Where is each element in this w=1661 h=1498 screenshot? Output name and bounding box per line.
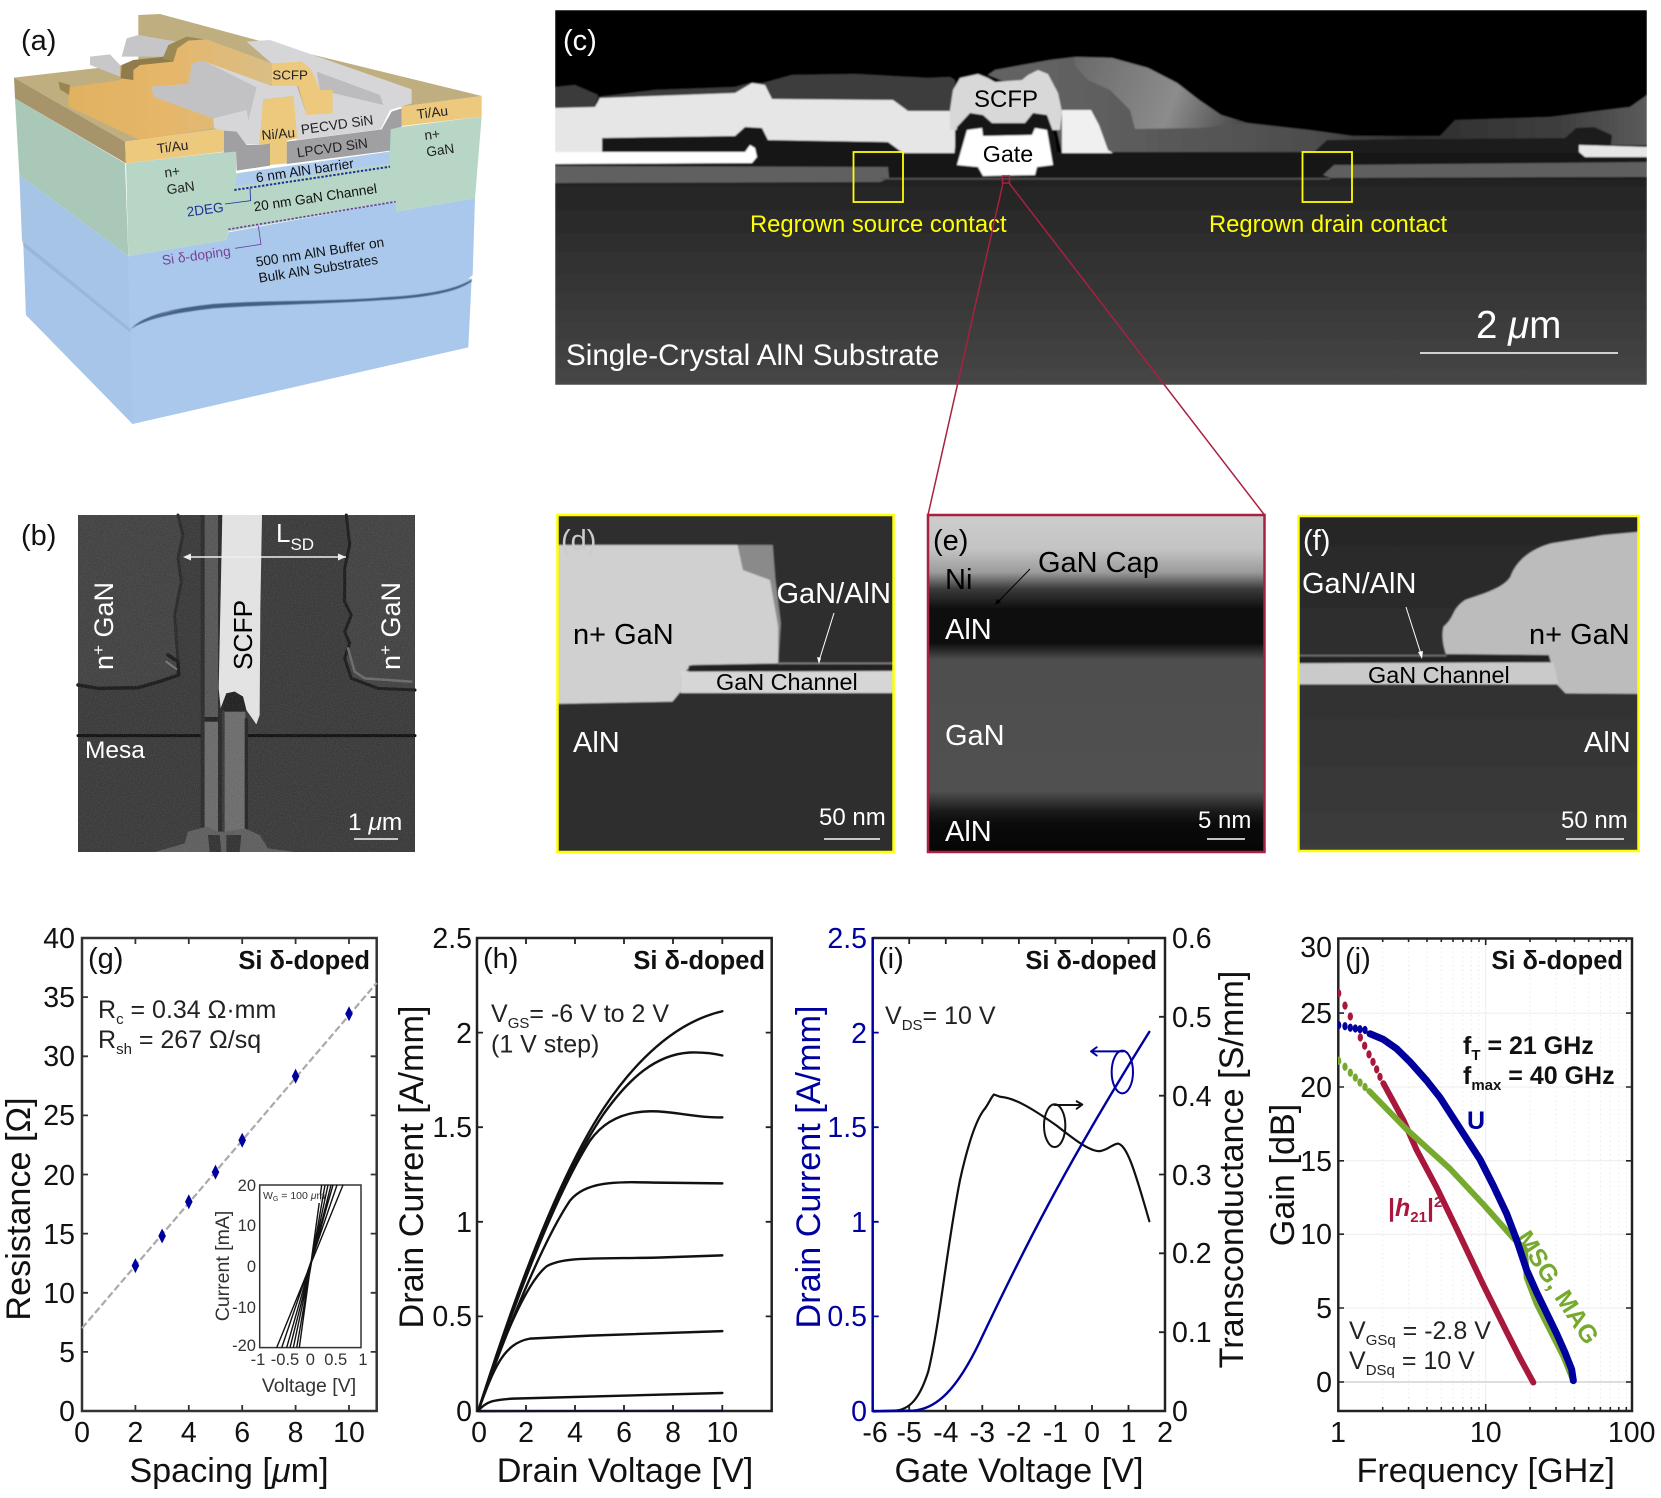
- AlN barrier label: AlN: [945, 614, 992, 646]
- x tick labels: [74, 1417, 365, 1449]
- x tick labels: 6: [616, 1417, 632, 1449]
- right y axis title: Transconductance [S/mm]: [1213, 971, 1251, 1368]
- sheet resistance text: R: [98, 1026, 116, 1054]
- AlN label: AlN: [573, 727, 620, 759]
- y tick labels: 25: [43, 1100, 75, 1132]
- y axis title: Resistance [Ω]: [0, 1097, 38, 1321]
- x tick labels: [862, 1417, 1173, 1449]
- Gate label: Gate: [983, 141, 1033, 167]
- L_SD dimension: [183, 518, 346, 560]
- right y tick labels: 0.4: [1172, 1081, 1212, 1113]
- U label: U: [1467, 1107, 1485, 1135]
- GaN/AlN label: GaN/AlN: [776, 578, 891, 610]
- x tick labels: 8: [288, 1417, 304, 1449]
- source contact box: [854, 152, 903, 202]
- fmax text: = 40 GHz: [1501, 1062, 1615, 1090]
- gain traces: [1336, 989, 1573, 1382]
- scale bar 1 um: 1 μm: [348, 809, 402, 836]
- x tick labels: -3: [970, 1417, 995, 1449]
- inset I-V chart: 0: [247, 1258, 256, 1276]
- y tick labels: 20: [43, 1160, 75, 1192]
- 2DEG dotted line: [234, 167, 390, 190]
- device layer stack: GaN: [425, 141, 455, 160]
- device layer stack: Si δ-doping: [161, 243, 232, 268]
- Mesa label: Mesa: [85, 737, 145, 764]
- drain bias text: = 10 V: [923, 1002, 996, 1030]
- device layer stack: 20 nm GaN Channel: [253, 181, 378, 214]
- y tick labels: 1: [456, 1207, 472, 1239]
- x tick labels: 10: [333, 1417, 365, 1449]
- fT text: = 21 GHz: [1480, 1032, 1594, 1060]
- device layer stack: 6 nm AlN barrier: [255, 156, 355, 185]
- panel outline: [558, 515, 894, 852]
- inset I-V chart: W: [263, 1190, 273, 1202]
- y tick labels: 25: [1300, 998, 1332, 1030]
- inset I-V chart: -0.5: [271, 1351, 299, 1369]
- drain bias text: V: [885, 1002, 902, 1030]
- y tick labels: [432, 923, 472, 1428]
- y tick labels: 2.5: [432, 923, 472, 955]
- y tick labels: 5: [59, 1337, 75, 1369]
- inset I-V chart: 1: [358, 1351, 368, 1369]
- x tick labels: -4: [933, 1417, 959, 1449]
- right y tick labels: 0.1: [1172, 1317, 1212, 1349]
- device layer stack: SCFP: [272, 67, 308, 82]
- y tick labels: 20: [1300, 1072, 1332, 1104]
- MSG MAG label: MSG, MAG: [1510, 1226, 1604, 1349]
- drain contact caption: Regrown drain contact: [1209, 211, 1447, 238]
- GaN channel label: GaN Channel: [716, 669, 858, 695]
- AlN buffer label: AlN: [945, 816, 992, 848]
- GaN cap arrow: [995, 569, 1030, 605]
- h21 label: |: [1427, 1194, 1434, 1222]
- SEM micrograph shapes: [78, 515, 415, 852]
- x tick labels: 100: [1608, 1417, 1655, 1449]
- x tick labels: 2: [518, 1417, 534, 1449]
- U trace: [1336, 1021, 1573, 1381]
- panel label h: (h): [483, 943, 518, 975]
- x tick labels: 1: [1330, 1417, 1346, 1449]
- device layer stack: Ti/Au: [416, 103, 449, 122]
- linear fit: [82, 983, 377, 1328]
- panel label e: (e): [933, 525, 968, 557]
- Si doping dotted line: [228, 202, 396, 229]
- x tick labels: -2: [1006, 1417, 1032, 1449]
- chart h: output characteristics: [393, 923, 772, 1490]
- scale bar 5 nm: 5 nm: [1198, 807, 1251, 834]
- x tick labels: 1: [1121, 1417, 1136, 1449]
- x tick labels: 4: [567, 1417, 583, 1449]
- device layer stack: 2DEG: [186, 200, 225, 220]
- panel a: 3D device schematic: [14, 14, 482, 424]
- y tick labels: 15: [43, 1219, 75, 1251]
- x tick labels: [471, 1417, 738, 1449]
- left y tick labels: [827, 923, 867, 1428]
- doping tag: Si δ-doped: [633, 947, 765, 975]
- Ni label: Ni: [945, 564, 972, 596]
- substrate caption: Single-Crystal AlN Substrate: [566, 339, 939, 372]
- panel c: cross-section TEM: [555, 10, 1647, 385]
- panel d: source contact TEM: [548, 510, 906, 857]
- right y tick labels: 0: [1172, 1396, 1188, 1428]
- gate sweep text: [491, 1000, 669, 1058]
- y tick labels: 5: [1316, 1293, 1332, 1325]
- GaN/AlN arrow: [1406, 607, 1423, 659]
- GaN label: GaN: [945, 720, 1005, 752]
- x axis title: Drain Voltage [V]: [497, 1452, 753, 1490]
- grid lines: [1338, 938, 1632, 1411]
- y tick labels: 30: [1300, 932, 1332, 964]
- chart i: transfer characteristics: [790, 923, 1251, 1490]
- x axis title: Gate Voltage [V]: [895, 1452, 1143, 1490]
- inset I-V chart: Current [mA]: [212, 1211, 234, 1321]
- n+ GaN left label: GaN: [89, 582, 119, 645]
- inset I-V chart: [212, 1177, 368, 1397]
- n+ GaN label: n+ GaN: [1529, 619, 1630, 651]
- y tick labels: 0.5: [432, 1301, 472, 1333]
- panel label i: (i): [878, 943, 904, 975]
- drain contact box: [1302, 152, 1352, 202]
- y tick labels: [43, 923, 75, 1428]
- L_SD dimension: SD: [290, 535, 314, 554]
- contact resistance text: R: [98, 996, 116, 1024]
- inset I-V chart: 0: [306, 1351, 315, 1369]
- inset I-V chart: -10: [232, 1299, 256, 1317]
- right y tick labels: 0.3: [1172, 1160, 1212, 1192]
- micrograph gradient: [928, 515, 1265, 852]
- n+ GaN label: n+ GaN: [573, 619, 674, 651]
- left y tick labels: 1: [851, 1207, 867, 1239]
- x tick labels: 10: [1470, 1417, 1502, 1449]
- y tick labels: 0: [1316, 1367, 1332, 1399]
- h21 label: 21: [1410, 1209, 1427, 1226]
- inset I-V chart: Voltage [V]: [262, 1375, 356, 1397]
- device layer stack: PECVD SiN: [300, 112, 374, 137]
- n+ GaN left label: n: [89, 655, 119, 670]
- sheet resistance text: sh: [116, 1041, 132, 1058]
- device layer stack: n+: [164, 164, 181, 180]
- left y tick labels: 2: [851, 1018, 867, 1050]
- left y tick labels: 0.5: [827, 1301, 867, 1333]
- inset I-V chart: = 100: [278, 1190, 311, 1202]
- VDSq text: DSq: [1366, 1362, 1395, 1379]
- x axis title: Spacing [μm]: [129, 1452, 329, 1490]
- gate sweep text: (1 V step): [491, 1030, 599, 1058]
- left y axis title: Drain Current [A/mm]: [790, 1006, 828, 1328]
- panel label f: (f): [1303, 525, 1330, 557]
- n+ GaN right label: n: [376, 655, 406, 670]
- SCFP label: SCFP: [974, 86, 1038, 113]
- source contact caption: Regrown source contact: [750, 211, 1007, 238]
- scale bar 50 nm: 50 nm: [819, 804, 886, 831]
- panel label d: (d): [561, 525, 596, 557]
- TEM image shapes: [555, 10, 1647, 385]
- y tick labels: 40: [43, 923, 75, 955]
- scale bar 50 nm: 50 nm: [1561, 807, 1628, 834]
- y tick labels: 15: [1300, 1146, 1332, 1178]
- right y tick labels: 0.5: [1172, 1002, 1212, 1034]
- n+ GaN left label: +: [89, 645, 108, 655]
- device layer stack: [14, 14, 482, 424]
- axes frame and ticks: [477, 938, 772, 1411]
- fT text: f: [1463, 1032, 1471, 1060]
- x tick labels: -1: [1043, 1417, 1068, 1449]
- device layer stack: 500 nm AlN Buffer on: [255, 235, 385, 270]
- MSG MAG trace: [1336, 1057, 1573, 1381]
- inset I-V chart: 10: [238, 1217, 256, 1235]
- y tick labels: 0: [59, 1396, 75, 1428]
- left y tick labels: 1.5: [827, 1112, 867, 1144]
- n+ GaN right label: GaN: [376, 582, 406, 645]
- x axis title: Frequency [GHz]: [1356, 1452, 1615, 1490]
- device layer stack: Bulk AlN Substrates: [257, 252, 379, 286]
- x tick labels: 0: [1084, 1417, 1100, 1449]
- contact resistance text: c: [116, 1011, 124, 1028]
- VGSq text: = -2.8 V: [1396, 1317, 1491, 1345]
- panel outline: [928, 515, 1264, 852]
- data markers: [132, 1006, 353, 1273]
- VDSq text: = 10 V: [1395, 1347, 1475, 1375]
- axes frame and ticks: [1338, 938, 1632, 1411]
- right y tick labels: 0.2: [1172, 1238, 1212, 1270]
- x tick labels: 10: [706, 1417, 738, 1449]
- right y tick labels: 0.6: [1172, 923, 1212, 955]
- x tick labels: [1330, 1417, 1655, 1449]
- y tick labels: 35: [43, 982, 75, 1014]
- panel e: gate TEM: [928, 515, 1265, 852]
- panel label c: (c): [563, 25, 597, 57]
- noise grain: [78, 515, 414, 852]
- device layer stack: n+: [424, 126, 441, 143]
- GaN/AlN arrow: [817, 613, 834, 664]
- x tick labels: -5: [897, 1417, 922, 1449]
- curves and direction markers: [873, 1032, 1149, 1411]
- fmax text: max: [1471, 1077, 1502, 1094]
- x tick labels: 0: [74, 1417, 90, 1449]
- device layer stack: GaN: [166, 179, 196, 197]
- VGSq text: GSq: [1366, 1332, 1396, 1349]
- GaN/AlN label: GaN/AlN: [1302, 568, 1416, 600]
- x tick labels: 8: [665, 1417, 681, 1449]
- VDSq text: V: [1349, 1347, 1366, 1375]
- chart g: resistance vs spacing: [0, 923, 377, 1490]
- SCFP label: SCFP: [228, 600, 258, 670]
- right y tick labels: [1172, 923, 1212, 1428]
- left y tick labels: 0: [851, 1396, 867, 1428]
- panel f: drain contact TEM: [1288, 510, 1652, 857]
- y tick labels: [1300, 932, 1332, 1399]
- inset I-V chart: 0.5: [324, 1351, 347, 1369]
- gate sweep text: GS: [508, 1015, 529, 1032]
- panel label j: (j): [1345, 943, 1371, 975]
- VGSq text: V: [1349, 1317, 1366, 1345]
- y tick labels: 1.5: [432, 1112, 472, 1144]
- contact resistance text: = 0.34 Ω·mm: [124, 996, 276, 1024]
- n+ GaN right label: +: [376, 645, 395, 655]
- x tick labels: 2: [1157, 1417, 1173, 1449]
- x tick labels: 4: [181, 1417, 197, 1449]
- doping tag: Si δ-doped: [1025, 947, 1157, 975]
- gate sweep text: V: [491, 1000, 508, 1028]
- inset I-V chart: G: [273, 1196, 278, 1203]
- fmax text: f: [1463, 1062, 1471, 1090]
- output curves: [478, 1011, 722, 1411]
- panel label g: (g): [88, 943, 123, 975]
- inset I-V chart: 20: [238, 1177, 256, 1195]
- micrograph shapes: [548, 510, 906, 857]
- y tick labels: 10: [1300, 1219, 1332, 1251]
- inset I-V chart: -1: [251, 1351, 265, 1369]
- sheet resistance text: = 267 Ω/sq: [132, 1026, 261, 1054]
- micrograph shapes: [1300, 517, 1638, 850]
- panel outline: [1298, 516, 1638, 851]
- axes frame and ticks: [82, 938, 377, 1411]
- panel label b: (b): [21, 520, 56, 552]
- GaN channel label: GaN Channel: [1368, 662, 1510, 688]
- y tick labels: 2: [456, 1018, 472, 1050]
- gate sweep text: = -6 V to 2 V: [529, 1000, 669, 1028]
- h21 label: |h: [1388, 1194, 1410, 1222]
- doping tag: Si δ-doped: [238, 947, 370, 975]
- scale bar 2 um: 2 μm: [1476, 304, 1561, 347]
- doping tag: Si δ-doped: [1491, 947, 1623, 975]
- y tick labels: 30: [43, 1041, 75, 1073]
- x tick labels: -6: [862, 1417, 888, 1449]
- h21 trace: [1336, 989, 1533, 1382]
- h21 label: 2: [1434, 1194, 1442, 1211]
- panel label a: (a): [21, 25, 56, 57]
- x tick labels: 2: [127, 1417, 143, 1449]
- device layer stack: LPCVD SiN: [296, 136, 369, 160]
- drain bias text: DS: [902, 1017, 923, 1034]
- y axis title: Drain Current [A/mm]: [393, 1006, 431, 1328]
- panel b: SEM image: [21, 515, 415, 852]
- left y tick labels: 2.5: [827, 923, 867, 955]
- AlN label: AlN: [1584, 727, 1631, 759]
- y tick labels: 10: [43, 1278, 75, 1310]
- x tick labels: 6: [234, 1417, 250, 1449]
- x tick labels: 0: [471, 1417, 487, 1449]
- device layer stack: Ti/Au: [156, 138, 189, 156]
- chart j: RF gain: [1264, 932, 1655, 1490]
- zoom lines from gate to panel e: [928, 176, 1264, 515]
- inset I-V chart: -20: [232, 1337, 256, 1355]
- GaN cap label: GaN Cap: [1038, 547, 1159, 579]
- y axis title: Gain [dB]: [1264, 1104, 1302, 1246]
- device layer stack: Ni/Au: [261, 125, 296, 143]
- axes frame and ticks: [873, 937, 1165, 1412]
- inset I-V chart: μm: [311, 1190, 325, 1202]
- y tick labels: 0: [456, 1396, 472, 1428]
- fT text: T: [1471, 1047, 1480, 1064]
- L_SD dimension: L: [276, 518, 290, 548]
